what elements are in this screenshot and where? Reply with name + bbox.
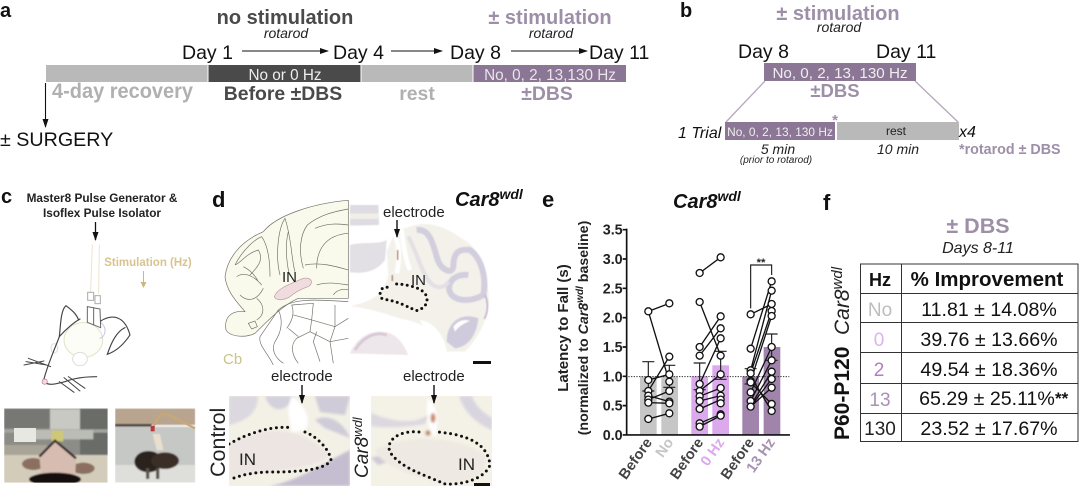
tan arrow xyxy=(140,271,146,288)
significance bracket: ** xyxy=(757,257,766,269)
frequency column: 130 xyxy=(864,419,896,440)
trial bar xyxy=(725,122,959,140)
black arrow xyxy=(94,222,96,240)
electrode arrow control xyxy=(301,385,303,403)
x tick labels: No xyxy=(653,435,677,461)
y axis title: Latency to Fall (s) xyxy=(555,264,572,392)
trial bar: rest xyxy=(886,124,907,138)
label b: b xyxy=(680,0,692,22)
bar caption: before DBS: Before ±DBS xyxy=(224,83,342,105)
atlas IN label: IN xyxy=(282,269,297,286)
equipment label: Master8 Pulse Generator & xyxy=(27,191,178,205)
panel e: latency chart xyxy=(542,187,790,483)
bars xyxy=(640,347,780,435)
error bars xyxy=(642,334,778,391)
timeline bar: No or 0 Hz xyxy=(248,67,322,84)
electrode label control: electrode xyxy=(271,368,333,385)
side label genotype: wdl xyxy=(829,266,846,289)
reference line xyxy=(628,375,789,378)
label c: c xyxy=(1,186,12,208)
frequency column: 0 xyxy=(874,330,884,351)
label d: d xyxy=(212,187,225,212)
improvement column: 23.52 ± 17.67% xyxy=(920,418,1058,440)
y tick labels: 0.5 xyxy=(603,399,623,415)
y tick labels: 3.0 xyxy=(603,252,623,268)
x tick labels: Before xyxy=(616,435,656,483)
bar caption: 4-day recovery: 4-day recovery xyxy=(52,80,193,103)
x tick labels: 13 Hz xyxy=(744,435,779,476)
subheading: rotarod: rotarod xyxy=(529,25,574,41)
session bar: No, 0, 2, 13, 130 Hz xyxy=(772,65,908,82)
trial bar: No, 0, 2, 13, 130 Hz xyxy=(727,125,833,139)
asterisk: * xyxy=(832,112,838,129)
1 trial label: 1 Trial xyxy=(678,125,722,142)
day labels xyxy=(182,42,649,64)
bar caption: DBS: ±DBS xyxy=(521,83,573,105)
table xyxy=(860,264,1078,442)
10 min: 10 min xyxy=(877,141,919,157)
panel b: trial structure xyxy=(678,0,1061,166)
genotype title: Car8 xyxy=(455,189,499,211)
y tick labels: 0.0 xyxy=(603,428,623,444)
control section xyxy=(229,396,350,486)
day labels: Day 4 xyxy=(333,42,384,64)
x tick labels: Before xyxy=(668,435,707,483)
frequency column: 13 xyxy=(869,390,891,411)
improvement column: 65.29 ± 25.11% xyxy=(919,388,1055,410)
timeline bar: No, 0, 2, 13,130 Hz xyxy=(484,67,616,84)
DBS caption: ±DBS xyxy=(810,80,860,101)
knockout section xyxy=(371,396,492,486)
paired lines xyxy=(648,257,772,427)
y tick labels: 1.5 xyxy=(603,340,623,356)
y tick labels xyxy=(603,223,623,444)
side label age: P60-P120 xyxy=(831,347,854,440)
frequency column xyxy=(864,300,896,440)
day labels: Day 11 xyxy=(589,42,649,64)
prior to rotarod: (prior to rotarod) xyxy=(740,155,812,166)
day 11: Day 11 xyxy=(876,41,936,63)
significance bracket xyxy=(751,257,772,308)
y axis subtitle: baseline) xyxy=(576,220,592,286)
heading: ± stimulation xyxy=(776,3,900,25)
heading: no stimulation: no stimulation xyxy=(217,7,353,29)
day labels: Day 8 xyxy=(450,42,501,64)
x4 label: x4 xyxy=(958,124,976,141)
heading: plus minus stimulation: ± stimulation xyxy=(488,7,612,29)
table grid xyxy=(860,264,1078,442)
electrode label top: electrode xyxy=(383,204,445,221)
arrow to surgery xyxy=(44,83,46,127)
panel d: cerebellum anatomy and histology xyxy=(206,186,524,486)
axes xyxy=(623,229,790,436)
improvement column xyxy=(919,299,1058,440)
scale bar top xyxy=(473,361,491,364)
chart title: wdl xyxy=(717,188,742,204)
day labels: Day 1 xyxy=(182,42,233,64)
label f: f xyxy=(823,190,831,215)
x tick labels: Before xyxy=(718,435,758,483)
stimulation label: Stimulation (Hz) xyxy=(104,257,192,269)
control section: IN xyxy=(239,450,256,469)
knockout row label: Car8 xyxy=(352,437,373,478)
y tick labels: 2.5 xyxy=(603,281,623,297)
subheading: rotarod xyxy=(817,19,862,35)
frequency column: No xyxy=(868,300,892,321)
improvement column: 49.54 ± 18.36% xyxy=(920,359,1058,381)
y tick labels: 3.5 xyxy=(603,223,623,239)
electrode arrow knockout xyxy=(433,385,435,403)
day 8: Day 8 xyxy=(738,41,789,63)
label a: a xyxy=(0,0,12,22)
zoom lines xyxy=(726,81,958,122)
surgery label: ± SURGERY xyxy=(0,129,113,151)
panel a: timeline xyxy=(0,0,649,151)
data points xyxy=(645,254,775,430)
panel f: improvement table xyxy=(823,190,1078,442)
frequency column: 2 xyxy=(874,360,884,381)
knockout row label: wdl xyxy=(350,416,365,437)
electrode label knockout: electrode xyxy=(403,368,465,385)
subheading: rotarod: rotarod xyxy=(264,25,309,41)
rotarod note: *rotarod ± DBS xyxy=(959,142,1061,158)
plot xyxy=(603,223,790,483)
table heading: ± DBS xyxy=(946,214,1010,238)
chart title: Car8 xyxy=(673,191,717,213)
control row label: Control xyxy=(206,408,230,477)
section IN label: IN xyxy=(411,272,426,289)
atlas drawing xyxy=(225,200,348,365)
5 min: 5 min xyxy=(761,141,795,157)
y axis subtitle: (normalized to Car8 xyxy=(576,303,592,435)
y tick labels: 1.0 xyxy=(603,369,623,385)
label e: e xyxy=(542,187,554,212)
panel c: stimulation setup xyxy=(1,186,195,486)
y axis subtitle: wdl xyxy=(575,286,586,303)
y tick labels: 2.0 xyxy=(603,311,623,327)
timeline bar xyxy=(46,65,626,84)
genotype title: wdl xyxy=(499,186,524,202)
equipment label: Isoflex Pulse Isolator xyxy=(43,206,161,220)
x tick labels: 0 Hz xyxy=(698,435,728,469)
improvement column: 39.76 ± 13.66% xyxy=(920,329,1058,351)
Cb label: Cb xyxy=(223,351,242,368)
table header row: % Improvement xyxy=(911,268,1063,291)
improvement column: 11.81 ± 14.08% xyxy=(921,299,1057,321)
electrode arrow top xyxy=(396,220,398,237)
day arrows xyxy=(242,50,587,52)
mouse drawing xyxy=(24,245,130,392)
knockout section: IN xyxy=(458,455,475,474)
photo: mouse head with electrode xyxy=(4,408,108,486)
table subheading: Days 8-11 xyxy=(942,240,1014,257)
significance stars: ** xyxy=(1055,389,1069,408)
photo: mouse on rotarod xyxy=(115,408,195,483)
bar caption: rest: rest xyxy=(399,83,435,105)
table header row: Hz xyxy=(869,270,891,290)
x tick labels xyxy=(616,435,779,483)
side label genotype: Car8 xyxy=(831,289,854,335)
coronal histology section xyxy=(350,205,489,355)
